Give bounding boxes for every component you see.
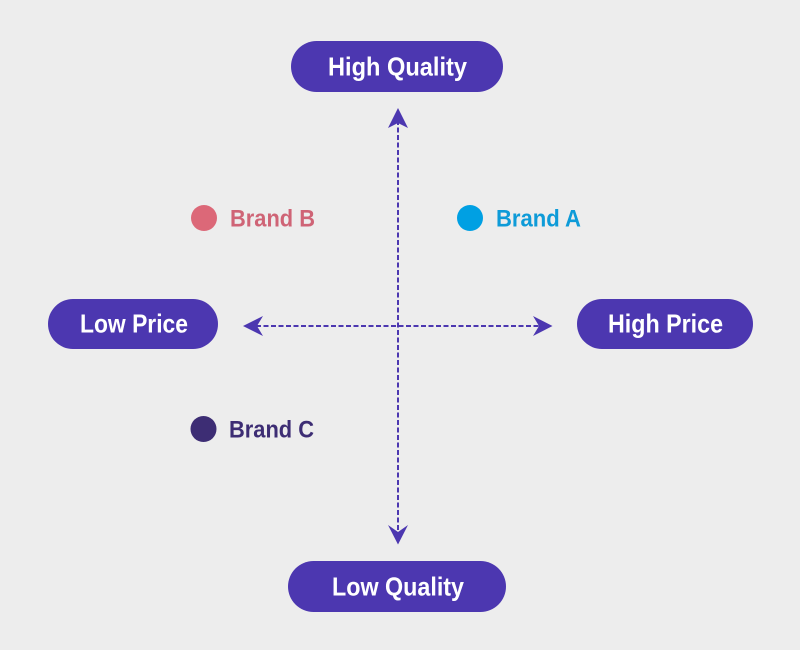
label pill: Low Price xyxy=(48,299,218,349)
data point: Brand B xyxy=(191,205,315,232)
data point: Brand A: Brand A xyxy=(496,206,581,232)
label pill: High Quality xyxy=(291,41,503,92)
label pill: High Price: High Price xyxy=(608,308,723,338)
label pill: High Price xyxy=(577,299,753,349)
label pill: Low Quality: Low Quality xyxy=(332,572,464,602)
label pill: Low Quality xyxy=(288,561,506,612)
label pill: Low Price: Low Price xyxy=(80,308,188,338)
data point: Brand A xyxy=(457,205,581,232)
data point: Brand C: Brand C xyxy=(229,416,314,444)
vertical axis arrow: quality xyxy=(388,108,408,544)
data point: Brand C xyxy=(190,416,314,444)
horizontal axis arrow: price xyxy=(243,316,552,336)
label pill: High Quality: High Quality xyxy=(328,52,467,82)
data point: Brand B: Brand B xyxy=(230,206,315,232)
